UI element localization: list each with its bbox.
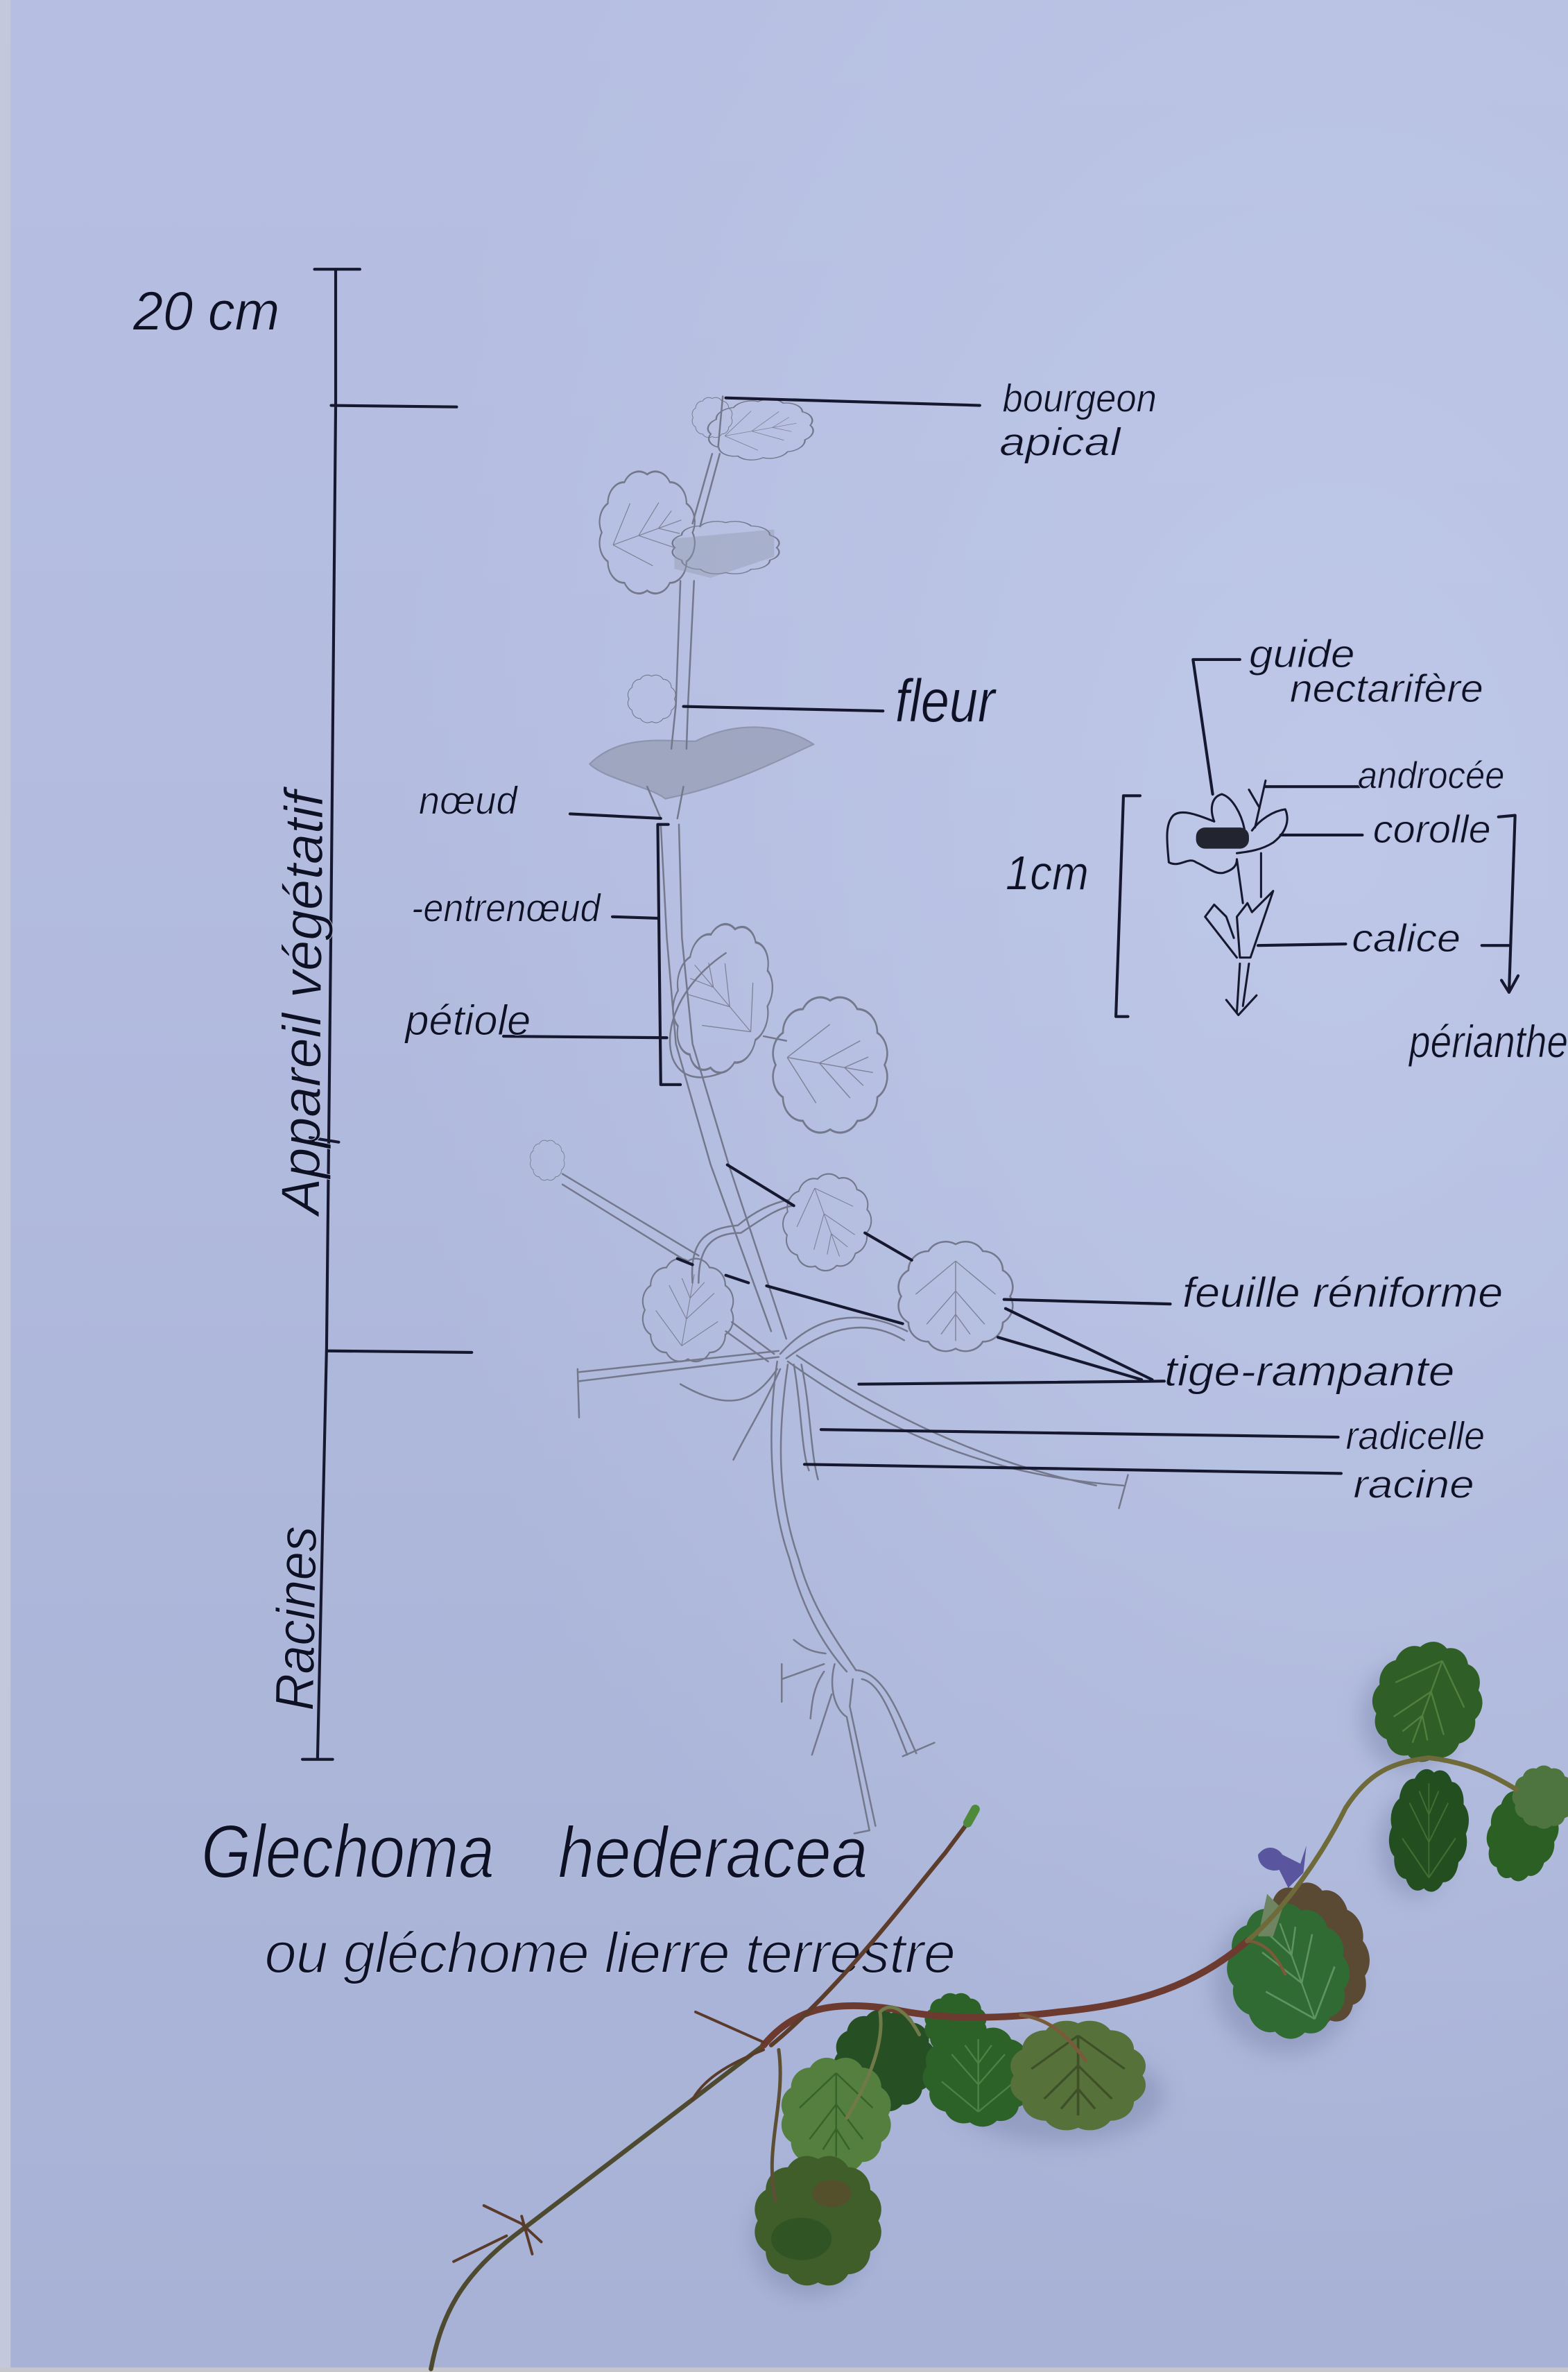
flower labels: corolle bbox=[1373, 808, 1491, 852]
flower labels: nectarifère bbox=[1290, 667, 1483, 711]
labels for the plant: pétiole bbox=[404, 997, 531, 1044]
leaf shadows bbox=[752, 1662, 1458, 2296]
labels for the plant: -entrenœud bbox=[411, 886, 602, 930]
far right leaves bbox=[1477, 1760, 1568, 1889]
main stem internode bbox=[661, 825, 786, 1339]
pressed real plant specimen bbox=[431, 1628, 1568, 2369]
labels for the plant: feuille réniforme bbox=[1182, 1269, 1503, 1316]
internode bracket bbox=[657, 825, 680, 1085]
labels for the plant: fleur bbox=[895, 667, 997, 734]
title bbox=[201, 1810, 956, 1985]
subtitle: ou gléchome lierre terrestre bbox=[265, 1920, 956, 1985]
flower drawing bbox=[1167, 780, 1287, 1015]
vertical scale bar bbox=[132, 269, 472, 1760]
bottom mottled leaf bbox=[755, 2156, 881, 2285]
ink leader lines bbox=[503, 398, 1341, 1473]
flower diagram bbox=[1006, 633, 1568, 1067]
pencil flower and flat leaf bbox=[589, 675, 813, 818]
lighter round leaf bbox=[782, 2058, 891, 2172]
1 cm bracket bbox=[1116, 796, 1140, 1017]
labels for the plant: nœud bbox=[419, 779, 519, 823]
perianth bracket and arrow bbox=[1482, 816, 1518, 992]
labels for the plant bbox=[404, 377, 1503, 1506]
leaf below node bbox=[1385, 1767, 1473, 1895]
labels for the plant: apical bbox=[999, 421, 1121, 465]
title: Glechoma bbox=[201, 1810, 494, 1894]
flower labels bbox=[1006, 633, 1568, 1067]
violet flower bbox=[1258, 1846, 1307, 1888]
scale label: 20 cm: 20 cm bbox=[132, 280, 279, 341]
upper leaf pair bbox=[600, 472, 779, 705]
top right leaf bbox=[1357, 1628, 1498, 1776]
labels for the plant: radicelle bbox=[1345, 1415, 1485, 1459]
lower leaves bbox=[531, 1140, 1013, 1361]
large leaf with flower bbox=[1214, 1846, 1384, 2051]
labels for the plant: racine bbox=[1353, 1463, 1474, 1506]
pencil drawing: plant upper part bbox=[531, 395, 1013, 1361]
stems bbox=[431, 1757, 1517, 2369]
hairy calyx bbox=[1258, 1894, 1282, 1936]
flower leader lines bbox=[1193, 660, 1362, 945]
apical bud and top leaves bbox=[692, 395, 816, 526]
pencil drawing: stolons and roots bbox=[578, 1318, 1128, 1834]
flower labels: 1cm bbox=[1006, 845, 1089, 900]
flower labels: androcée bbox=[1358, 754, 1504, 796]
rotated label: Racines: Racines bbox=[264, 1526, 328, 1711]
flower labels: guide bbox=[1249, 633, 1355, 676]
flower labels: calice bbox=[1352, 917, 1461, 961]
title: hederacea bbox=[558, 1812, 868, 1893]
labels for the plant: bourgeon bbox=[1003, 377, 1157, 420]
petiole leaf pair bbox=[663, 918, 887, 1133]
row of leaves bbox=[828, 1993, 1146, 2134]
labels for the plant: tige-rampante bbox=[1164, 1348, 1454, 1395]
rotated label: Appareil végétatif: Appareil végétatif bbox=[270, 786, 334, 1218]
